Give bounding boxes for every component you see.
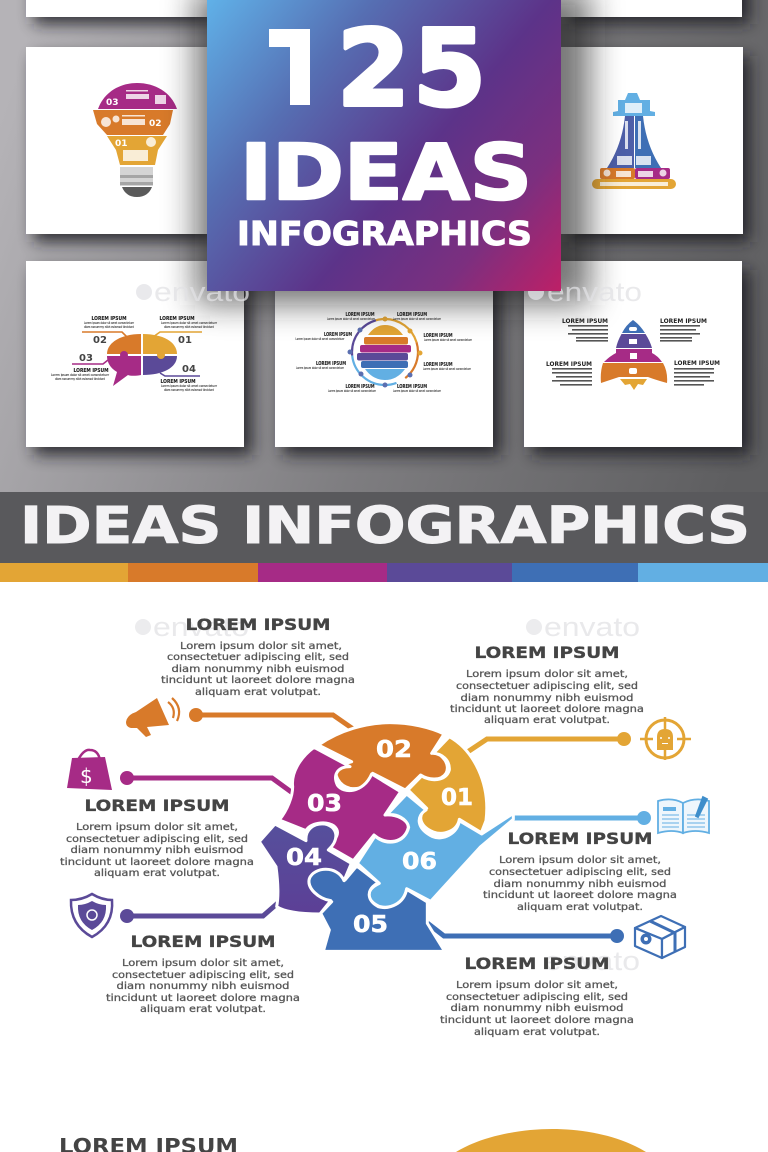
title: INFOGRAPHICS: INFOGRAPHICS <box>237 214 532 253</box>
small labels: rocket: LOREM IPSUM <box>562 318 608 325</box>
small labels: circle: LOREM IPSUM <box>324 332 352 338</box>
text block: top center: aliquam erat volutpat. <box>195 687 321 698</box>
piece 03 <box>279 747 408 861</box>
text block: middle right: consectetuer adipiscing elit, sed <box>489 867 671 878</box>
icon: lightbulb infographic: 03 <box>106 98 119 108</box>
text block: lower right: consectetuer adipiscing elit, sed <box>446 992 628 1003</box>
text block: top center: Lorem ipsum dolor sit amet, <box>180 641 342 652</box>
text block: middle right: Lorem ipsum dolor sit amet, <box>499 855 661 866</box>
text block: top center: consectetuer adipiscing elit, sed <box>167 652 349 663</box>
text block: top center <box>161 615 355 698</box>
text block: top right: aliquam erat volutpat. <box>484 715 610 726</box>
icon: rocket infographic <box>601 320 667 390</box>
text block: lower left: consectetuer adipiscing elit, sed <box>112 970 294 981</box>
small labels: speech bubble: LOREM IPSUM <box>74 368 109 374</box>
text block: lower left: LOREM IPSUM <box>130 932 276 951</box>
icon: target <box>640 717 691 760</box>
small labels: speech bubble: diam nonummy nibh euismod tincidunt <box>164 388 214 392</box>
title: 125: 125 <box>264 8 486 130</box>
watermark: envato lower: envato <box>544 946 640 976</box>
text block: lower right: Lorem ipsum dolor sit amet, <box>456 980 618 991</box>
piece labels: 02 <box>376 737 412 763</box>
icon: puzzle speech bubble: 01 <box>178 335 192 346</box>
text block: top center: diam nonummy nibh euismod <box>172 664 344 675</box>
icon: circular infographic <box>348 316 422 388</box>
text block: lower left: tincidunt ut laoreet dolore magna <box>106 993 300 1004</box>
small labels: circle: Lorem ipsum dolor sit amet consectetuer <box>296 337 345 341</box>
heading: IDEAS INFOGRAPHICS: IDEAS INFOGRAPHICS <box>20 497 750 556</box>
text block: lower right: aliquam erat volutpat. <box>474 1027 600 1038</box>
small labels: circle: LOREM IPSUM <box>346 312 375 318</box>
small labels: rocket: LOREM IPSUM <box>674 360 720 367</box>
text block: top right: consectetuer adipiscing elit, sed <box>456 681 638 692</box>
text block: middle right: diam nonummy nibh euismod <box>494 879 666 890</box>
small labels: speech bubble: Lorem ipsum dolor sit amet consectetuer <box>51 373 109 377</box>
small labels: speech bubble: diam nonummy nibh euismod tincidunt <box>164 325 214 329</box>
piece 01 <box>408 737 487 833</box>
text block: top right <box>450 643 644 726</box>
panel: circle card <box>275 261 493 447</box>
small labels: rocket: LOREM IPSUM <box>660 318 707 325</box>
small labels: circle: Lorem ipsum dolor sit amet consectetuer <box>424 338 472 342</box>
piece labels <box>286 737 473 938</box>
panel: lightbulb card <box>26 47 216 234</box>
text block: top right: LOREM IPSUM <box>474 643 620 662</box>
text block: lower left <box>106 932 300 1015</box>
connector lines <box>120 708 651 943</box>
piece 04 <box>259 824 351 914</box>
small labels: speech bubble <box>51 316 217 392</box>
watermark: envato upper row: envato <box>154 277 250 307</box>
chart: puzzle head <box>259 723 513 951</box>
text block: lower right <box>440 954 634 1038</box>
text block: middle right: LOREM IPSUM <box>508 829 652 848</box>
small labels: speech bubble: Lorem ipsum dolor sit amet consectetuer <box>161 321 217 325</box>
text block: middle left: aliquam erat volutpat. <box>94 868 220 879</box>
small labels: circle: LOREM IPSUM <box>397 384 427 390</box>
small labels: rocket <box>546 318 720 386</box>
small labels: circle: Lorem ipsum dolor sit amet consectetuer <box>328 389 376 393</box>
icon: shopping bag <box>67 750 112 790</box>
small labels: circle: LOREM IPSUM <box>424 333 453 339</box>
icon: puzzle speech bubble: 04 <box>182 364 196 375</box>
center square shadow <box>195 0 590 305</box>
small labels: speech bubble: diam nonummy nibh euismod tincidunt <box>55 377 105 381</box>
piece labels: 06 <box>402 849 437 875</box>
small labels: circle: LOREM IPSUM <box>346 384 375 390</box>
panel: rocket card <box>524 261 742 447</box>
watermark: envato upper row: envato <box>547 277 642 307</box>
icon: puzzle speech bubble <box>72 332 202 386</box>
text block: middle left <box>60 796 254 879</box>
text block: top center: tincidunt ut laoreet dolore magna <box>161 675 355 686</box>
piece 05 <box>309 866 445 951</box>
icon: lightbulb infographic <box>93 83 177 197</box>
icon: lightbulb infographic: 02 <box>149 119 162 129</box>
text block: lower left: Lorem ipsum dolor sit amet, <box>122 958 284 969</box>
small labels: circle: LOREM IPSUM <box>397 312 427 318</box>
piece labels: 03 <box>307 791 342 817</box>
icon: shopping bag: $ <box>80 764 93 788</box>
icon: chess tower infographic <box>592 93 676 189</box>
icon: puzzle speech bubble: 03 <box>79 353 93 364</box>
background: gray showcase area <box>0 0 768 492</box>
watermark: envato lower: envato <box>544 612 640 642</box>
piece 02 <box>318 723 447 790</box>
panel: top-row partial cards <box>26 0 742 17</box>
text block: top center: LOREM IPSUM <box>186 615 330 634</box>
panel: center title square <box>207 0 561 291</box>
small labels: speech bubble: LOREM IPSUM <box>160 316 195 322</box>
watermark: envato lower <box>135 612 640 976</box>
text block: middle right: aliquam erat volutpat. <box>517 902 643 913</box>
watermark: envato lower: envato <box>153 612 249 642</box>
piece labels: 04 <box>286 845 322 871</box>
colour stripe <box>0 563 768 582</box>
small labels: circle: Lorem ipsum dolor sit amet consectetuer <box>296 366 344 370</box>
icon: shield <box>71 894 112 937</box>
small labels: speech bubble: Lorem ipsum dolor sit amet consectetuer <box>161 384 217 388</box>
small labels: circle <box>296 312 472 393</box>
chart: cropped yellow dome at bottom <box>456 1129 646 1152</box>
small labels: circle: Lorem ipsum dolor sit amet consectetuer <box>327 317 375 321</box>
text block: middle right <box>483 829 677 913</box>
panel: tower card <box>552 47 743 234</box>
piece 06 <box>357 794 513 907</box>
small labels: circle: Lorem ipsum dolor sit amet consectetuer <box>393 389 441 393</box>
text block: top right: diam nonummy nibh euismod <box>460 693 634 704</box>
icon: open book <box>658 797 709 833</box>
icon: lightbulb infographic: 01 <box>115 139 128 149</box>
small labels: rocket: LOREM IPSUM <box>546 361 592 368</box>
small labels: speech bubble: LOREM IPSUM <box>160 379 196 385</box>
card shadows <box>34 0 750 455</box>
text block: top right: Lorem ipsum dolor sit amet, <box>466 669 628 680</box>
text block: top right: tincidunt ut laoreet dolore magna <box>450 704 644 715</box>
small labels: circle: Lorem ipsum dolor sit amet consectetuer <box>393 317 441 321</box>
panel: speech bubble card <box>26 261 244 447</box>
text block: lower right: LOREM IPSUM <box>464 954 610 973</box>
piece labels: 05 <box>353 912 388 938</box>
text block: middle right: tincidunt ut laoreet dolore magna <box>483 890 677 901</box>
title: IDEAS: IDEAS <box>240 129 532 218</box>
text block: middle left: tincidunt ut laoreet dolore magna <box>60 857 254 868</box>
small labels: speech bubble: LOREM IPSUM <box>92 316 127 322</box>
small labels: circle: LOREM IPSUM <box>424 362 453 368</box>
text block: middle left: diam nonummy nibh euismod <box>70 845 244 856</box>
piece labels: 01 <box>441 785 473 811</box>
text block: lower left: aliquam erat volutpat. <box>140 1004 266 1015</box>
icon: puzzle speech bubble: 02 <box>93 335 107 346</box>
text block: lower right: diam nonummy nibh euismod <box>450 1003 624 1014</box>
text block: middle left: Lorem ipsum dolor sit amet, <box>76 822 238 833</box>
panel: white infographic background <box>0 582 768 1152</box>
text block: lower right: tincidunt ut laoreet dolore magna <box>440 1015 634 1026</box>
small labels: speech bubble: diam nonummy nibh euismod tincidunt <box>84 325 134 329</box>
small labels: speech bubble: Lorem ipsum dolor sit amet consectetuer <box>84 321 134 325</box>
text block: middle left: consectetuer adipiscing elit, sed <box>66 834 248 845</box>
small labels: circle: Lorem ipsum dolor sit amet consectetuer <box>423 367 471 371</box>
icon: box <box>635 916 685 958</box>
text block: middle left: LOREM IPSUM <box>84 796 230 815</box>
watermark: envato upper row <box>136 277 642 307</box>
banner: section title band <box>0 492 768 563</box>
small labels: circle: LOREM IPSUM <box>316 361 346 367</box>
text block: lower left: diam nonummy nibh euismod <box>116 981 290 992</box>
icon: megaphone <box>126 698 179 737</box>
